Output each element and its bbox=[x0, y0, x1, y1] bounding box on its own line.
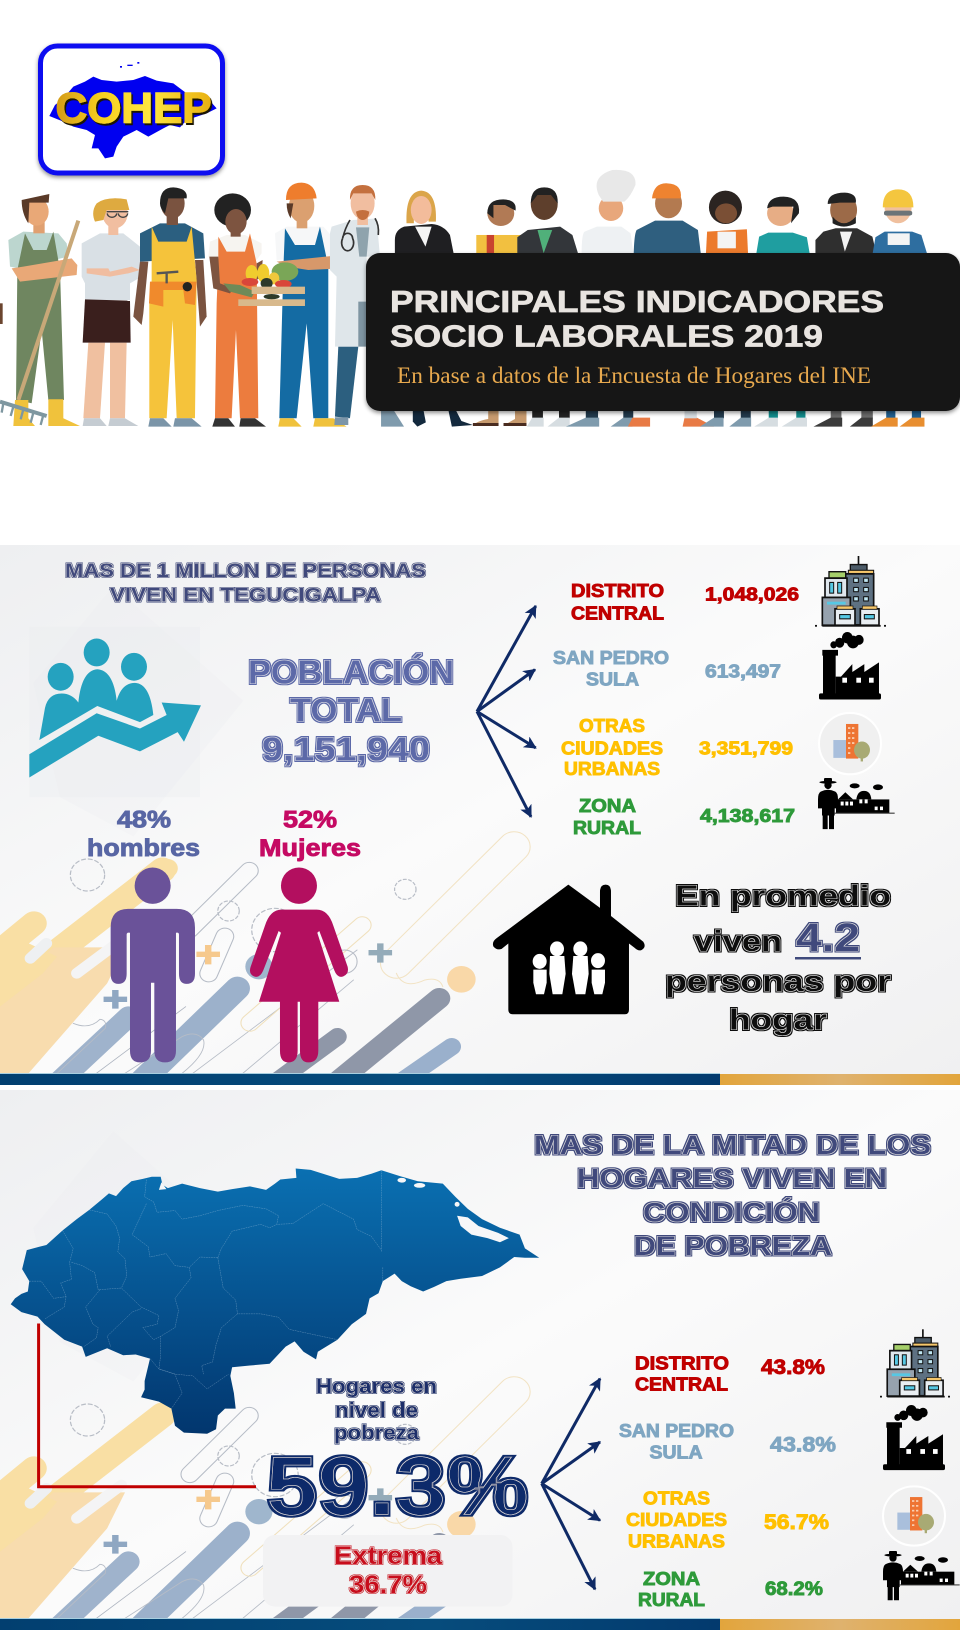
label: hogares en nivel de pobreza bbox=[316, 1376, 437, 1444]
icon: rural zone (poverty) bbox=[883, 1551, 960, 1600]
row: Distrito Central population bbox=[571, 581, 799, 623]
row: Otras ciudades urbanas poverty: URBANAS bbox=[628, 1532, 725, 1552]
row: Distrito Central poverty: CENTRAL bbox=[635, 1375, 728, 1395]
heading: mas de la mitad: HOGARES VIVEN EN bbox=[577, 1164, 887, 1194]
total population figure bbox=[248, 654, 454, 768]
row: Otras ciudades urbanas population: URBANAS bbox=[564, 759, 660, 779]
workers' feet below the panel bbox=[381, 408, 924, 427]
worker: woman in orange with produce bbox=[208, 193, 266, 427]
row: Zona rural population bbox=[573, 796, 795, 838]
row: Zona rural poverty: 68.2% bbox=[765, 1579, 823, 1600]
worker: woman with glasses bbox=[82, 198, 142, 426]
panel: extreme poverty bbox=[263, 1535, 512, 1607]
callout: average household: personas por bbox=[665, 966, 891, 998]
panel: extreme poverty: Extrema bbox=[334, 1542, 443, 1570]
icon: Distrito Central building bbox=[815, 556, 886, 627]
row: Zona rural population: ZONA bbox=[579, 796, 636, 816]
row: San Pedro Sula poverty bbox=[619, 1421, 836, 1462]
worker: yellow overalls bbox=[133, 187, 207, 427]
logo map of Honduras bbox=[49, 62, 217, 158]
row: San Pedro Sula population bbox=[553, 648, 781, 690]
row: Distrito Central population: DISTRITO bbox=[571, 581, 664, 601]
heading: mas de 1 millon: VIVEN EN TEGUCIGALPA bbox=[110, 586, 381, 606]
row: Distrito Central population: 1,048,026 bbox=[705, 585, 799, 605]
row: Otras ciudades urbanas population: 3,351,799 bbox=[699, 738, 793, 758]
total population figure: POBLACIÓN bbox=[248, 654, 454, 690]
label: hogares en nivel de pobreza: nivel de bbox=[335, 1400, 418, 1422]
women share: Mujeres bbox=[259, 835, 361, 862]
icon: San Pedro Sula factory (poverty) bbox=[883, 1405, 945, 1470]
panel: poverty background bbox=[0, 1090, 960, 1630]
workers behind the title panel bbox=[395, 170, 927, 257]
panel: title bbox=[366, 253, 960, 411]
main title line 2: SOCIO LABORALES 2019 bbox=[390, 319, 823, 354]
row: San Pedro Sula population: 613,497 bbox=[705, 662, 781, 682]
heading: mas de la mitad: DE POBREZA bbox=[634, 1231, 832, 1261]
row: Otras ciudades urbanas population bbox=[561, 716, 793, 779]
icon: San Pedro Sula factory bbox=[819, 632, 881, 699]
row: Zona rural poverty: ZONA bbox=[643, 1569, 700, 1589]
heading: mas de la mitad bbox=[534, 1130, 931, 1261]
main title line 1: PRINCIPALES INDICADORES bbox=[390, 284, 884, 319]
row: Zona rural population: 4,138,617 bbox=[700, 806, 795, 826]
row: Otras ciudades urbanas poverty: CIUDADES bbox=[626, 1510, 727, 1530]
label: hogares en nivel de pobreza: pobreza bbox=[334, 1422, 420, 1444]
logo wordmark: COHEP bbox=[56, 84, 212, 132]
row: Zona rural poverty: RURAL bbox=[638, 1590, 705, 1610]
row: Otras ciudades urbanas poverty bbox=[626, 1489, 829, 1552]
total population figure: TOTAL bbox=[290, 692, 402, 728]
row: San Pedro Sula poverty: 43.8% bbox=[770, 1434, 836, 1457]
row: Distrito Central population: CENTRAL bbox=[571, 603, 664, 623]
worker: man in blue overalls with helmet bbox=[275, 183, 347, 427]
worker: farmer with rake bbox=[0, 194, 80, 426]
arrows: population breakdown bbox=[477, 606, 536, 817]
icon: other cities bbox=[819, 713, 881, 774]
icon: Distrito Central building (poverty) bbox=[880, 1329, 950, 1397]
callout: average household: En promedio bbox=[675, 880, 891, 912]
row: Otras ciudades urbanas poverty: OTRAS bbox=[643, 1489, 710, 1509]
women share: 52% bbox=[283, 806, 337, 834]
heading: mas de la mitad: MAS DE LA MITAD DE LOS bbox=[534, 1130, 931, 1160]
label: hogares en nivel de pobreza: Hogares en bbox=[316, 1376, 437, 1398]
total population figure: 9,151,940 bbox=[262, 730, 430, 768]
row: Zona rural poverty bbox=[638, 1569, 823, 1610]
icon: population growth bbox=[29, 627, 201, 797]
callout: average household: hogar bbox=[729, 1004, 827, 1036]
produce crate bbox=[238, 262, 305, 306]
row: Distrito Central poverty: 43.8% bbox=[761, 1356, 825, 1379]
worker: doctor bbox=[330, 185, 380, 425]
heading: mas de la mitad: CONDICIÓN bbox=[643, 1196, 820, 1228]
row: San Pedro Sula poverty: SAN PEDRO bbox=[619, 1421, 734, 1441]
icon: woman bbox=[250, 867, 348, 1062]
row: Distrito Central poverty: DISTRITO bbox=[635, 1354, 729, 1374]
row: San Pedro Sula population: SAN PEDRO bbox=[553, 648, 669, 668]
connector: red line from map to figure bbox=[39, 1324, 256, 1487]
average value 4.2: 4.2 bbox=[796, 916, 860, 960]
icon: man bbox=[111, 867, 195, 1062]
icon: house with family bbox=[493, 885, 645, 1014]
callout: average household: viven bbox=[694, 926, 782, 958]
row: Otras ciudades urbanas population: CIUDADES bbox=[561, 738, 663, 758]
figure: 59.3%: 59.3% bbox=[266, 1439, 529, 1533]
callout: average household bbox=[665, 880, 891, 1036]
panel: extreme poverty: 36.7% bbox=[349, 1571, 427, 1599]
map of Honduras bbox=[11, 1169, 539, 1434]
men share bbox=[87, 806, 200, 862]
row: Otras ciudades urbanas population: OTRAS bbox=[579, 716, 645, 736]
heading: mas de 1 millon: MAS DE 1 MILLON DE PERSONAS bbox=[65, 561, 426, 582]
heading: mas de 1 millon bbox=[65, 561, 426, 606]
arrows: poverty breakdown bbox=[542, 1379, 600, 1589]
row: San Pedro Sula population: SULA bbox=[586, 670, 639, 690]
subtitle: En base a datos de la Encuesta de Hogares del INE bbox=[397, 363, 871, 388]
logo: COHEP bbox=[40, 46, 222, 173]
icon: other cities (poverty) bbox=[883, 1486, 945, 1546]
women share bbox=[259, 806, 361, 862]
panel: population background bbox=[0, 545, 960, 1085]
row: Distrito Central poverty bbox=[635, 1354, 825, 1395]
icon: rural zone bbox=[818, 778, 895, 829]
row: Otras ciudades urbanas poverty: 56.7% bbox=[764, 1511, 829, 1534]
row: San Pedro Sula poverty: SULA bbox=[650, 1442, 702, 1462]
men share: hombres bbox=[87, 835, 200, 862]
header: workers illustration bbox=[0, 170, 927, 427]
men share: 48% bbox=[117, 806, 171, 834]
row: Zona rural population: RURAL bbox=[573, 818, 641, 838]
